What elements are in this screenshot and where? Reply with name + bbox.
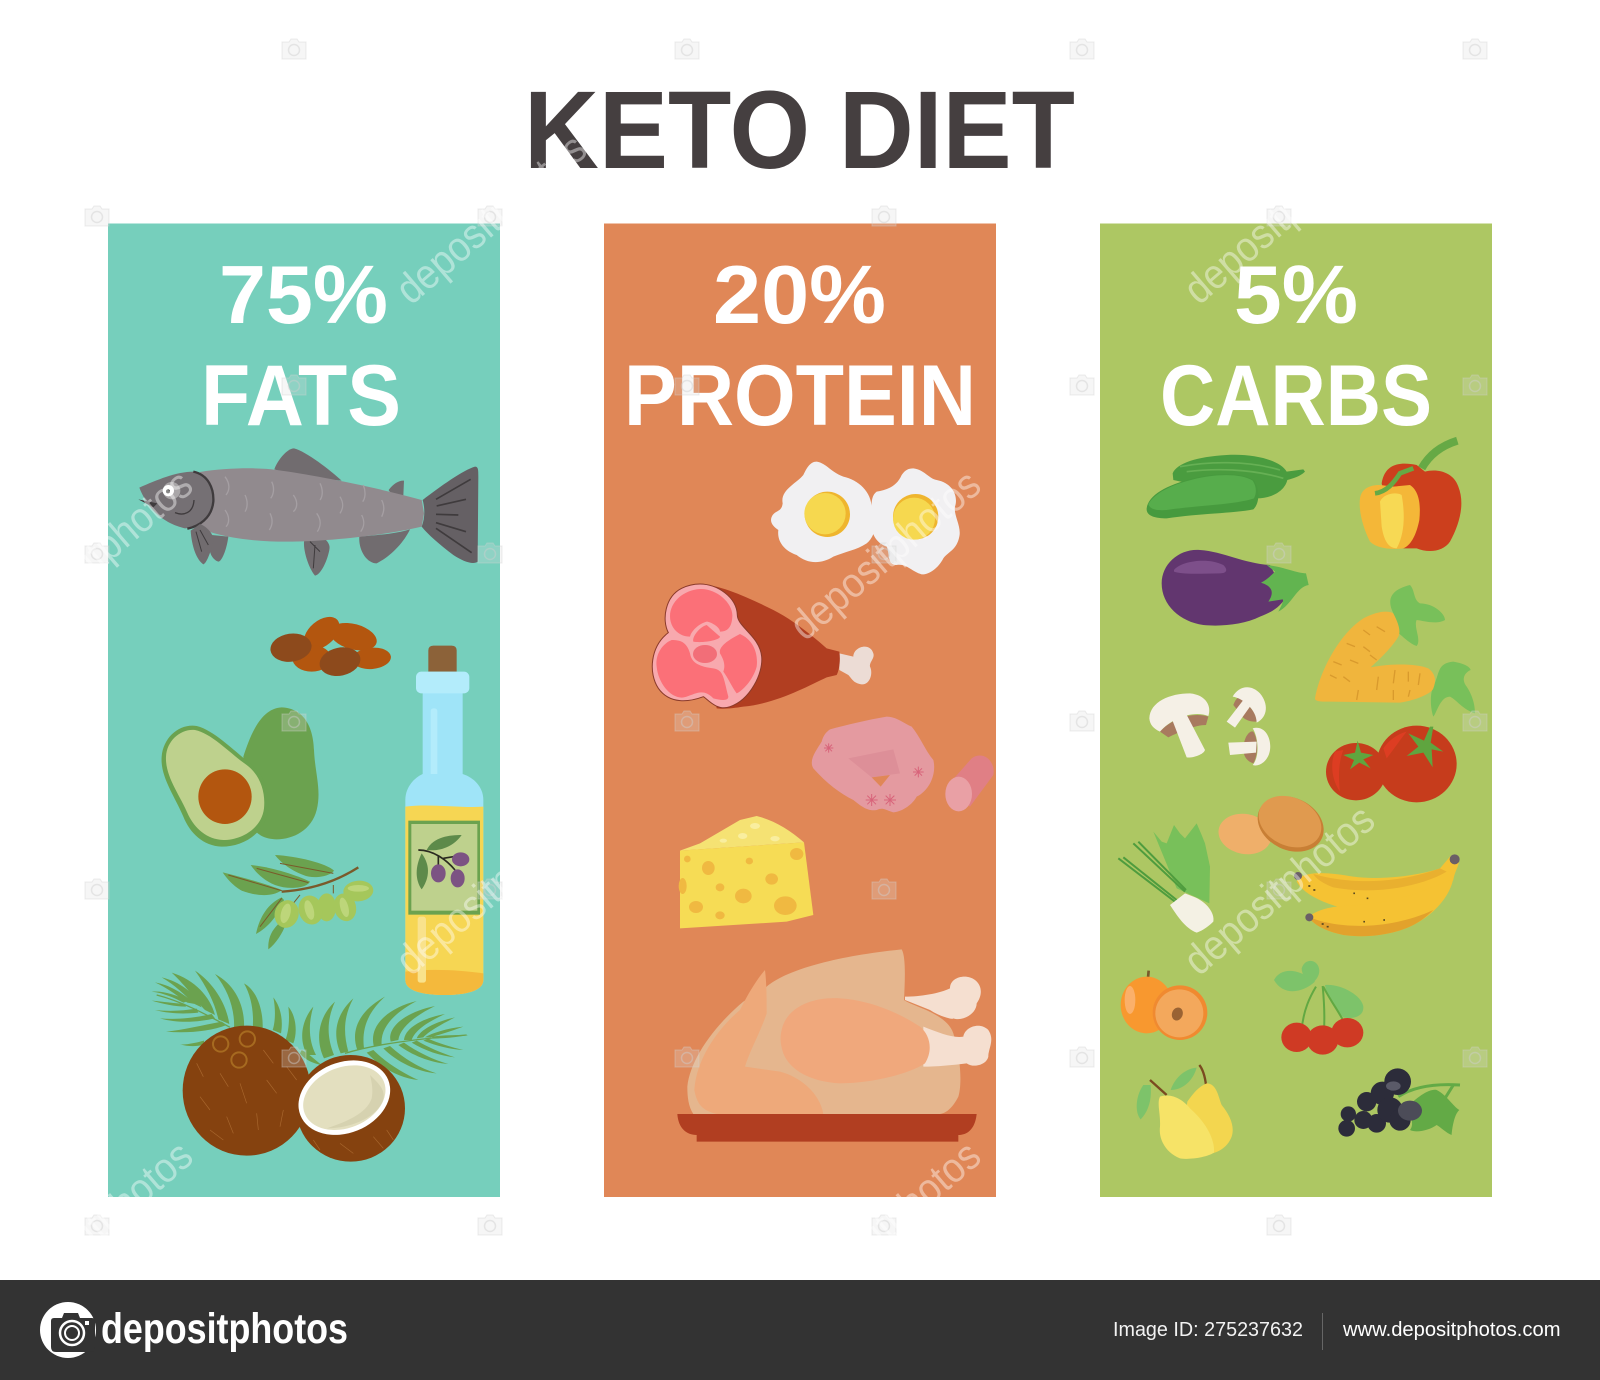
panel: carbs: [1100, 224, 1492, 1197]
text watermarks: depositphotos: [1174, 124, 1383, 313]
text watermarks: depositphotos: [386, 795, 595, 984]
logo wordmark: depositphotos: [101, 1305, 348, 1353]
icon: bananas: [1294, 854, 1460, 936]
text watermarks: depositphotos: [780, 1131, 989, 1320]
icon: olive oil bottle: [405, 646, 483, 995]
icon: cheese: [679, 816, 813, 928]
heading: 75%: 75%: [219, 248, 388, 341]
icon: camera logo: [40, 1302, 96, 1358]
text watermarks: depositphotos: [780, 460, 989, 649]
camera watermark icons: [85, 39, 1487, 1235]
icon: potatoes: [1215, 786, 1333, 862]
icon: eggplant: [1162, 550, 1309, 626]
icon: peach: [1121, 971, 1207, 1040]
website url: www.depositphotos.com: [1342, 1319, 1560, 1341]
icon: pears: [1137, 1065, 1233, 1159]
icon: ham: [652, 584, 874, 709]
icon: cherries: [1274, 961, 1363, 1055]
icon: roast chicken on plate: [677, 949, 991, 1142]
text watermarks: depositphotos: [386, 124, 595, 313]
footer background: [0, 1280, 1600, 1380]
icon: olive branch: [223, 855, 374, 949]
icon: sliced meat: [812, 717, 934, 812]
icon: mushrooms: [1149, 687, 1270, 766]
heading: 5%: 5%: [1234, 248, 1358, 341]
icon: fish: [138, 448, 478, 576]
panel background: carbs: [1100, 224, 1492, 1197]
panel background: fats: [108, 224, 500, 1197]
icon: carrots: [1315, 585, 1475, 717]
icon: sausage: [945, 756, 994, 811]
icon: avocado: [162, 707, 319, 847]
icon: tomatoes: [1326, 726, 1457, 802]
title: KETO DIET: [524, 69, 1075, 192]
icon: black currants: [1338, 1068, 1460, 1137]
heading: 20%: 20%: [713, 248, 886, 341]
heading: fats: FATS: [201, 348, 401, 444]
icon: cucumbers: [1147, 455, 1305, 518]
icon: coconuts with palm fronds: [152, 971, 468, 1162]
panel: fats: [108, 224, 500, 1197]
text watermarks: depositphotos: [1174, 795, 1383, 984]
panel: protein: [604, 224, 996, 1197]
icon: fried eggs: [771, 462, 960, 574]
icon: bell peppers: [1360, 441, 1461, 551]
text watermarks: [0, 124, 1383, 1320]
icon: almonds: [269, 610, 392, 680]
panel background: protein: [604, 224, 996, 1197]
heading: protein: PROTEIN: [624, 348, 976, 444]
image id: Image ID: 275237632: [1113, 1319, 1303, 1341]
footer bar: [0, 1280, 1600, 1380]
icon: green onion: [1118, 823, 1214, 933]
heading: carbs: CARBS: [1160, 348, 1432, 444]
